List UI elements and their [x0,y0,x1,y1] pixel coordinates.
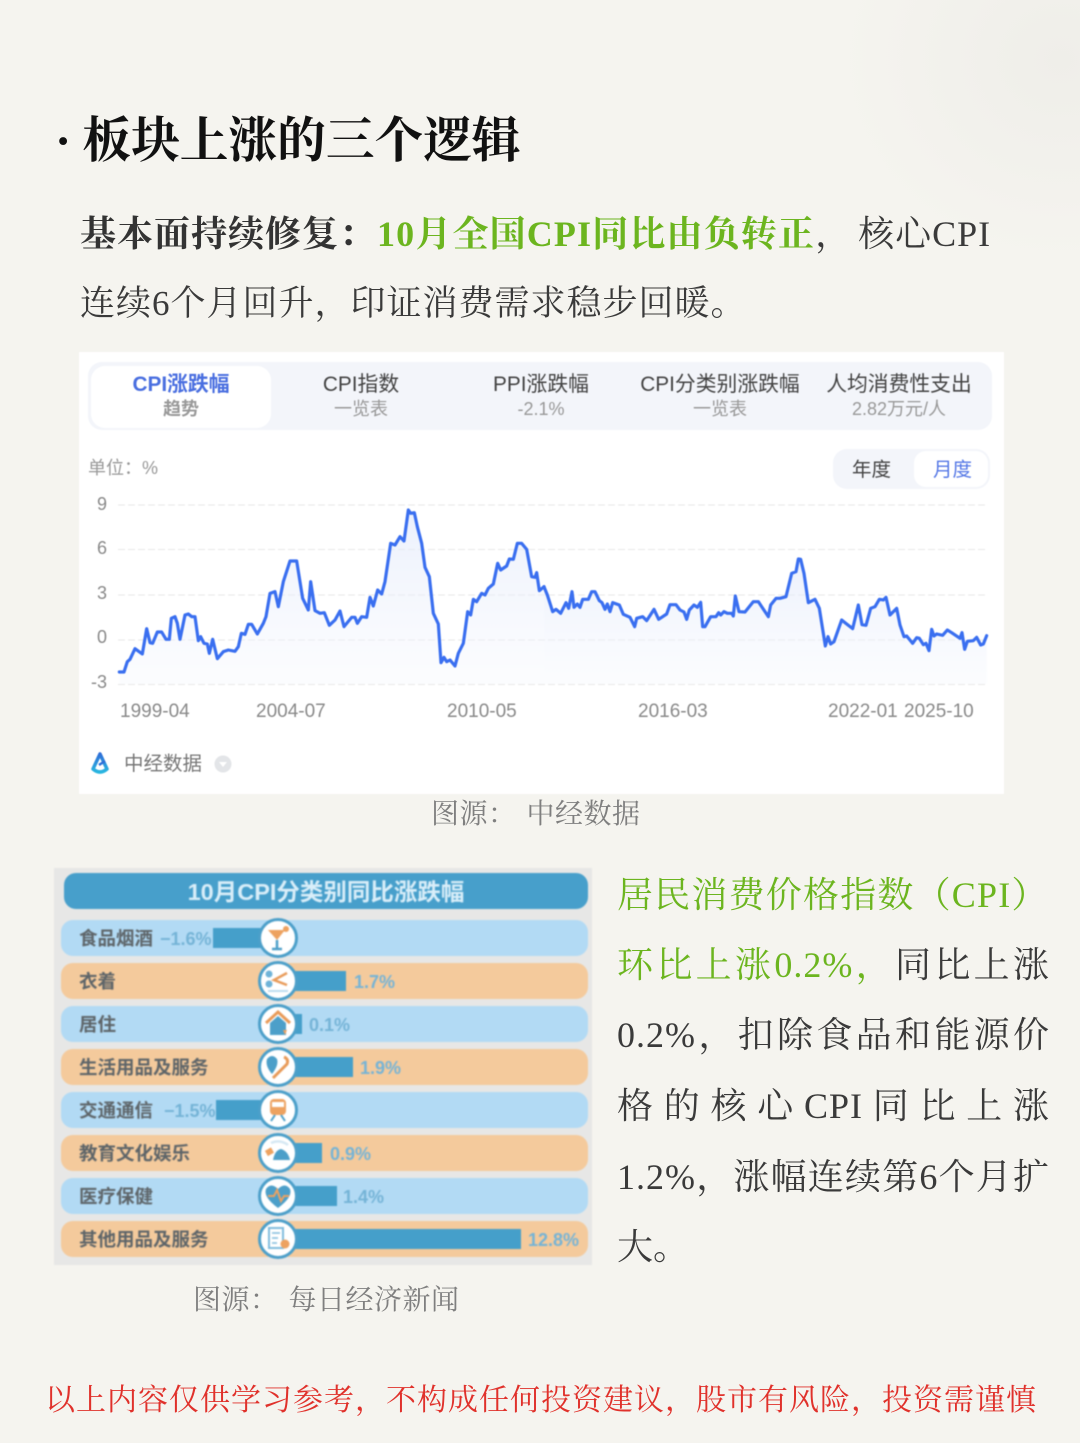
panel: CPI category bar chart: 12.8% [528,1230,579,1250]
panel: CPI category bar chart: −1.6% [160,929,212,949]
panel: CPI trend chart screenshot: 一览表 [693,399,747,419]
text block: CPI explanation: 大。 [617,1227,689,1267]
disclaimer: 以上内容仅供学习参考，不构成任何投资建议，股市有风险，投资需谨慎 [45,1384,1037,1417]
panel: CPI trend chart screenshot: CPI分类别涨跌幅 [640,373,800,396]
panel: CPI trend chart screenshot: 6 [97,538,107,558]
panel: CPI category bar chart: 其他用品及服务 [79,1229,209,1250]
caption: bar chart source: 图源： 每日经济新闻 [193,1285,460,1316]
panel: CPI category bar chart: 食品烟酒 [79,928,153,949]
panel: CPI trend chart screenshot: PPI涨跌幅 [493,373,589,396]
panel: CPI category bar chart: 居住 [79,1014,116,1035]
panel: CPI category bar chart: 1.9% [360,1058,401,1078]
panel: CPI trend chart screenshot: 2010-05 [447,701,517,722]
panel: CPI trend chart screenshot: 月度 [933,459,972,481]
panel: CPI category bar chart: 医疗保健 [79,1186,153,1207]
panel: CPI trend chart screenshot [79,352,1004,794]
panel: CPI category bar chart: 衣着 [79,971,116,992]
intro paragraph: 连续6个月回升，印证消费需求稳步回暖。 [80,284,747,323]
panel: CPI trend chart screenshot: 一览表 [334,399,388,419]
panel: CPI trend chart screenshot: 2022-01 [828,701,898,722]
panel: CPI trend chart screenshot: -2.1% [517,399,565,419]
intro paragraph: 基本面持续修复：10月全国CPI同比由负转正，核心CPI [80,214,991,254]
panel: CPI trend chart screenshot: 9 [97,494,107,514]
caption: chart source: 图源： 中经数据 [431,799,641,830]
panel: CPI category bar chart: 1.4% [343,1187,384,1207]
text block: CPI explanation: 居民消费价格指数（CPI） [617,875,1049,915]
panel: CPI category bar chart: 教育文化娱乐 [79,1143,190,1164]
text block: CPI explanation [617,875,1050,1267]
panel: CPI category bar chart: 0.9% [330,1144,371,1164]
panel: CPI trend chart screenshot: 2025-10 [904,701,974,722]
panel: CPI category bar chart [54,868,592,1265]
panel: CPI trend chart screenshot: -3 [91,672,107,692]
panel: CPI trend chart screenshot: CPI指数 [323,373,399,396]
panel: CPI trend chart screenshot: CPI涨跌幅 [132,373,230,396]
panel: CPI trend chart screenshot: 中经数据 [124,753,202,775]
text block: CPI explanation: 0.2%，扣除食品和能源价 [617,1015,1050,1055]
text block: CPI explanation: 1.2%，涨幅连续第6个月扩 [617,1157,1050,1197]
panel: CPI trend chart screenshot: 1999-04 [120,701,190,722]
panel: CPI category bar chart: 生活用品及服务 [79,1057,209,1078]
text block: CPI explanation: 环比上涨0.2%，同比上涨 [617,945,1050,985]
panel: CPI trend chart screenshot: 人均消费性支出 [826,373,972,396]
panel: CPI category bar chart: 0.1% [309,1015,350,1035]
intro paragraph [80,214,991,323]
panel: CPI category bar chart: −1.5% [164,1101,216,1121]
panel: CPI category bar chart: 交通通信 [79,1100,153,1121]
panel: CPI trend chart screenshot: 0 [97,627,107,647]
panel: CPI trend chart screenshot: 2.82万元/人 [852,399,946,419]
text block: CPI explanation: 格的核心CPI同比上涨 [617,1086,1050,1126]
panel: CPI trend chart screenshot: 2004-07 [256,701,326,722]
panel: CPI trend chart screenshot: 趋势 [163,399,199,419]
panel: CPI category bar chart: 1.7% [354,972,395,992]
panel: CPI trend chart screenshot: 2016-03 [638,701,708,722]
panel: CPI category bar chart: 10月CPI分类别同比涨跌幅 [188,879,464,905]
panel: CPI trend chart screenshot: 3 [97,583,107,603]
panel: CPI trend chart screenshot: 年度 [852,459,891,481]
title: · 板块上涨的三个逻辑 [55,114,521,168]
panel: CPI trend chart screenshot: 单位：% [88,458,158,478]
